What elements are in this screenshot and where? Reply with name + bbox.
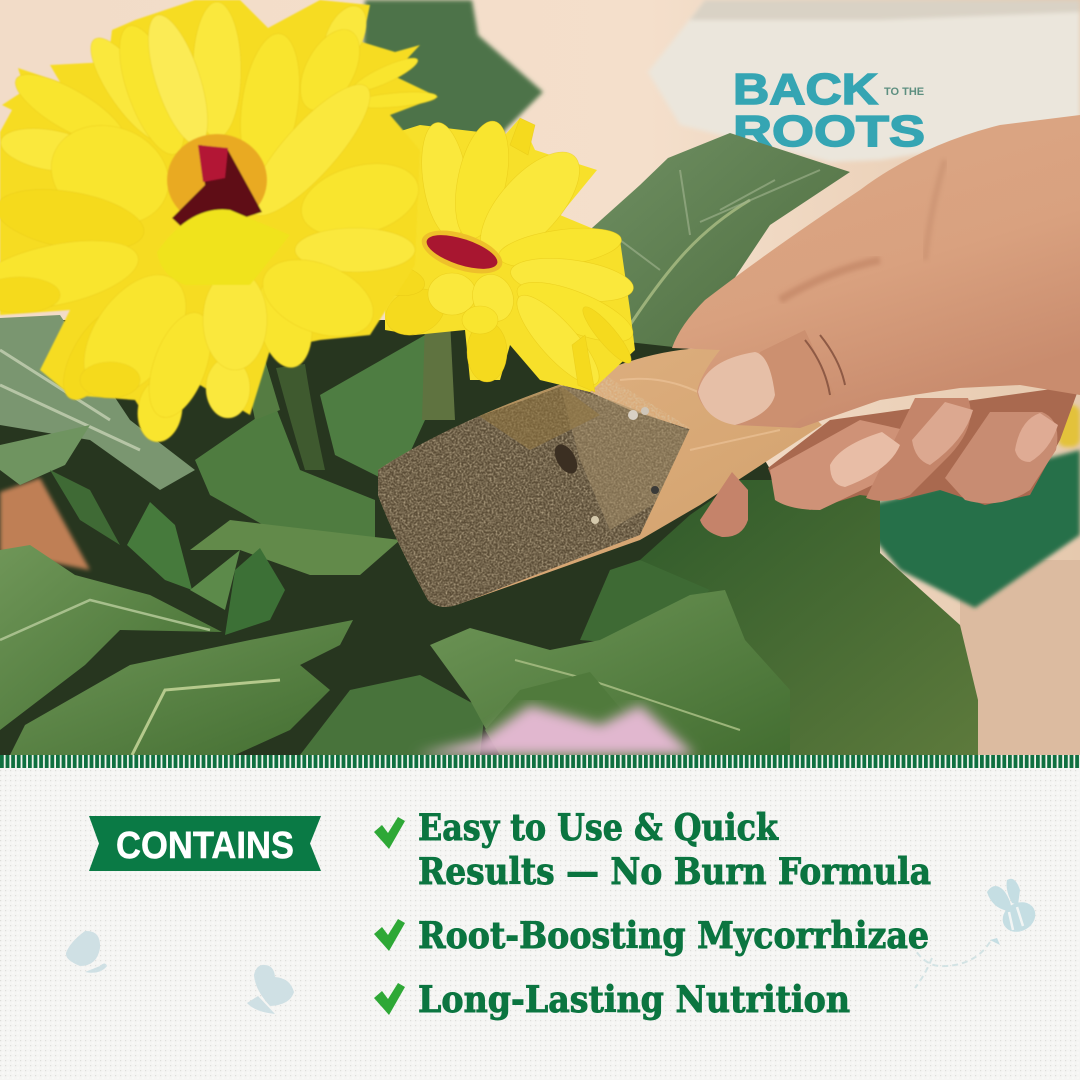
decorative stripe border	[0, 755, 1080, 768]
bag logo: Back to the Roots: ROOTS	[733, 107, 925, 156]
icon: butterfly centre	[247, 965, 294, 1014]
green product bag, lower right	[850, 450, 1080, 608]
panel: fabric text area	[0, 755, 1080, 1080]
text: long lasting: Long-Lasting Nutrition	[418, 979, 850, 1021]
bag logo: Back to the Roots: TO THE	[884, 86, 924, 98]
flower: large yellow gerbera	[0, 0, 438, 445]
bag logo: Back to the Roots: BACK	[733, 65, 878, 114]
background: blurred table and wall	[0, 0, 1080, 755]
icon: bee with dashed trail	[912, 879, 1041, 988]
leaf: large textured leaf behind hand	[592, 133, 850, 360]
flower 1 silhouette	[0, 0, 438, 440]
dark foliage mass	[0, 320, 800, 755]
feature list	[374, 807, 931, 1021]
flower: small yellow gerbera	[385, 118, 635, 392]
leaf: upper middle	[127, 335, 425, 635]
ribbon banner: contains	[89, 816, 321, 871]
icon: check 3	[374, 983, 405, 1015]
leaf: lower left	[0, 545, 485, 755]
bag logo: Back to the Roots	[736, 72, 924, 148]
fertilizer soil on spoon	[378, 377, 690, 607]
leaf: far left pale ribbed leaf	[0, 315, 195, 545]
leaf: lower centre glossy	[430, 560, 790, 755]
ribbon banner: contains: CONTAINS	[116, 825, 294, 867]
hand holding spoon	[672, 115, 1080, 537]
hand: fingernails	[698, 352, 1058, 487]
flower centre: small	[422, 230, 502, 274]
text: easy to use: Easy to Use & Quick	[418, 807, 779, 849]
flower 2 silhouette	[365, 118, 635, 392]
hand: palm and thumb	[672, 115, 1080, 428]
flower 1 upper and side petals	[0, 0, 437, 322]
blurred pink flower foreground	[415, 705, 695, 755]
icon: check 2	[374, 919, 405, 951]
leaf: top behind flowers	[362, 0, 545, 134]
text: results: Results — No Burn Formula	[418, 851, 931, 893]
yellow blur behind fingers	[1058, 405, 1080, 447]
hand: back fingers	[700, 385, 1080, 537]
leaf: lower right large	[640, 480, 978, 755]
flower centre: large	[166, 134, 268, 286]
icon: check 1	[374, 817, 405, 849]
flower stems	[248, 320, 455, 470]
text: root boosting: Root-Boosting Mycorrhizae	[418, 915, 929, 957]
icon: butterfly left	[66, 931, 107, 973]
panel: product photo	[0, 0, 1080, 755]
wooden spoon	[378, 348, 822, 607]
terracotta pot	[0, 478, 90, 570]
product bag, white with logo	[648, 0, 1080, 162]
flower 1 lower petals	[64, 260, 372, 443]
flower 2 petals	[386, 118, 634, 392]
